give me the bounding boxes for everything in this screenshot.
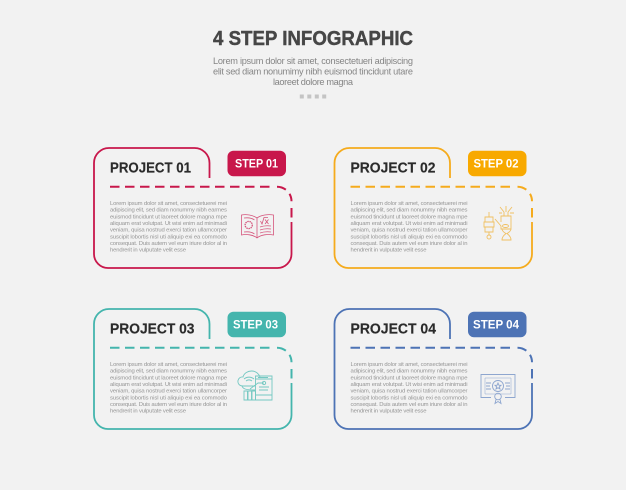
card outline [334,148,532,268]
card outline [94,309,292,429]
body text: aliquam erat volutpat. Ut wisi enim ad minimadi [350,221,468,227]
body text: consequat. Duis autem vel eum iriure dolor al in [350,402,468,408]
body text [110,362,228,415]
body text: hendrerit in vulputate velit esse [350,248,427,254]
step badge [468,151,526,176]
body text [110,201,228,254]
body text: veniam, quisa nostrud exerci tation ullamcorper [110,228,227,234]
body text: Lorem ipsum dolor sit amet, consectetuerei mei [350,362,468,368]
subtitle text block: laoreet dolore magna [273,77,354,87]
step badge: STEP 01 [235,157,278,171]
panel: project 04 [334,309,532,429]
body text: consequat. Duis autem vel eum iriure dolor al in [110,402,227,408]
icon: open book [242,215,274,238]
body text [350,362,468,415]
card outline [334,309,532,429]
icon: robotic hand and flowchart [484,206,514,240]
body text: Lorem ipsum dolor sit amet, consectetuerei mei [350,201,468,207]
body text: adipiscing elit, sed diam nonummy nibh earmes [350,208,468,214]
panel: project 03 [94,309,292,429]
body text: hendrerit in vulputate velit esse [110,248,187,254]
project heading: PROJECT 01 [110,160,191,176]
panel: project 01 [94,148,292,268]
body text: Lorem ipsum dolor sit amet, consectetuerei mei [110,201,227,207]
body text: euismod tincidunt ut laoreet dolore magna mpe [350,214,468,220]
body text [350,201,468,254]
step badge [228,151,286,176]
icon: certificate with seal [481,374,515,404]
subtitle text block: elit sed diam nonumimy nibh euismod tincidunt utare [213,66,413,76]
body text: consequat. Duis autem vel eum iriure dolor al in [350,241,468,247]
project heading: PROJECT 04 [350,322,436,338]
title: 4 STEP INFOGRAPHIC [213,27,413,50]
body text: suscipit lobortis nisl uti aliquip exi ea commodo [110,395,228,401]
project heading: PROJECT 02 [350,160,436,176]
body text: aliquam erat volutpat. Ut wisi enim ad minimadi [110,382,227,388]
body text: suscipit lobortis nisl uti aliquip exi ea commodo [350,395,468,401]
body text: euismod tincidunt ut laoreet dolore magna mpe [350,375,468,381]
body text: suscipit lobortis nisl uti aliquip exi ea commodo [110,234,228,240]
step badge: STEP 03 [233,318,278,332]
step badge [468,312,526,337]
panel: project 02 [334,148,532,268]
step badge [228,312,286,337]
body text: veniam, quisa nostrud exerci tation ullamcorper [350,389,468,395]
body text: suscipit lobortis nisl uti aliquip exi ea commodo [350,234,468,240]
icon: cloud, phone and bars [238,371,272,400]
dashed edge [110,187,292,218]
body text: consequat. Duis autem vel eum iriure dolor al in [110,241,227,247]
step badge: STEP 04 [473,318,519,332]
body text: euismod tincidunt ut laoreet dolore magna mpe [110,375,228,381]
body text: adipiscing elit, sed diam nonummy nibh earmes [110,369,227,375]
step badge: STEP 02 [474,157,519,171]
body text: hendrerit in vulputate velit esse [110,409,187,415]
subtitle text block: Lorem ipsum dolor sit amet, consectetueri adipiscing [213,56,413,66]
body text: aliquam erat volutpat. Ut wisi enim ad minimadi [350,382,468,388]
subtitle text block [213,56,413,87]
body text: adipiscing elit, sed diam nonummy nibh earmes [350,369,468,375]
body text: euismod tincidunt ut laoreet dolore magna mpe [110,214,228,220]
body text: Lorem ipsum dolor sit amet, consectetuerei mei [110,362,227,368]
project heading: PROJECT 03 [110,322,194,338]
body text: hendrerit in vulputate velit esse [350,409,427,415]
dashed edge [350,348,532,379]
body text: veniam, quisa nostrud exerci tation ullamcorper [110,389,227,395]
card outline [94,148,292,268]
pagination dots [300,94,326,98]
body text: aliquam erat volutpat. Ut wisi enim ad minimadi [110,221,227,227]
dashed edge [350,187,532,218]
body text: adipiscing elit, sed diam nonummy nibh earmes [110,208,227,214]
body text: veniam, quisa nostrud exerci tation ullamcorper [350,228,468,234]
dashed edge [110,348,292,379]
